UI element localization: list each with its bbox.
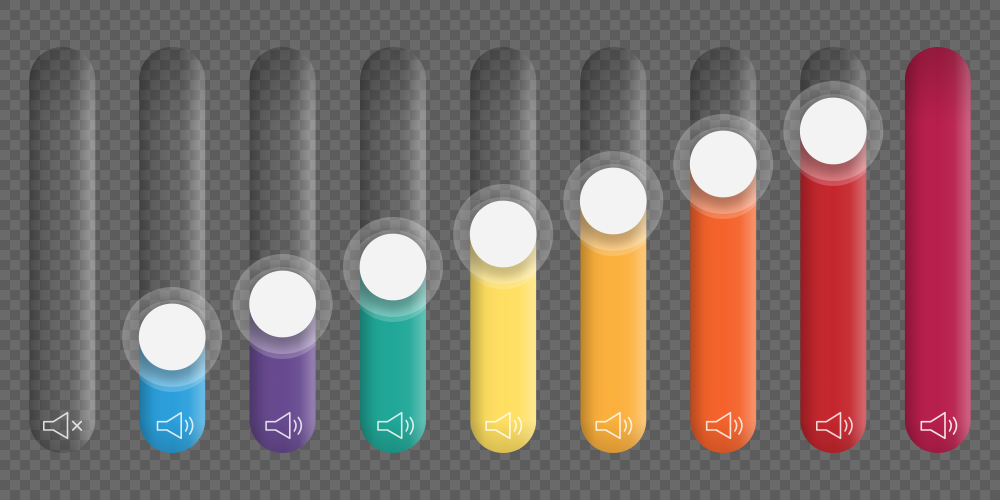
icon: muted speaker [44,413,81,438]
icon: speaker [707,413,742,438]
slider: teal level [343,47,443,453]
knob with halo [563,151,663,251]
slider: orange level [673,47,773,453]
slider: crimson full [905,47,971,453]
knob with halo [783,81,883,181]
icon: speaker [266,413,301,438]
slider: amber level [563,47,663,453]
icon: speaker [817,413,852,438]
icon: speaker [486,413,521,438]
icon: speaker [378,413,413,438]
slider: blue level [122,47,222,453]
icon: speaker [596,413,632,438]
icon: speaker [158,413,193,438]
knob with halo [673,114,773,214]
knob with halo [343,217,443,317]
slider: purple level [233,47,333,453]
slider: yellow level [453,47,553,453]
knob with halo [453,184,553,284]
slider: muted empty [29,47,95,453]
knob with halo [122,287,222,387]
slider: red level [783,47,883,453]
knob with halo [233,254,333,354]
icon: speaker [921,413,956,438]
